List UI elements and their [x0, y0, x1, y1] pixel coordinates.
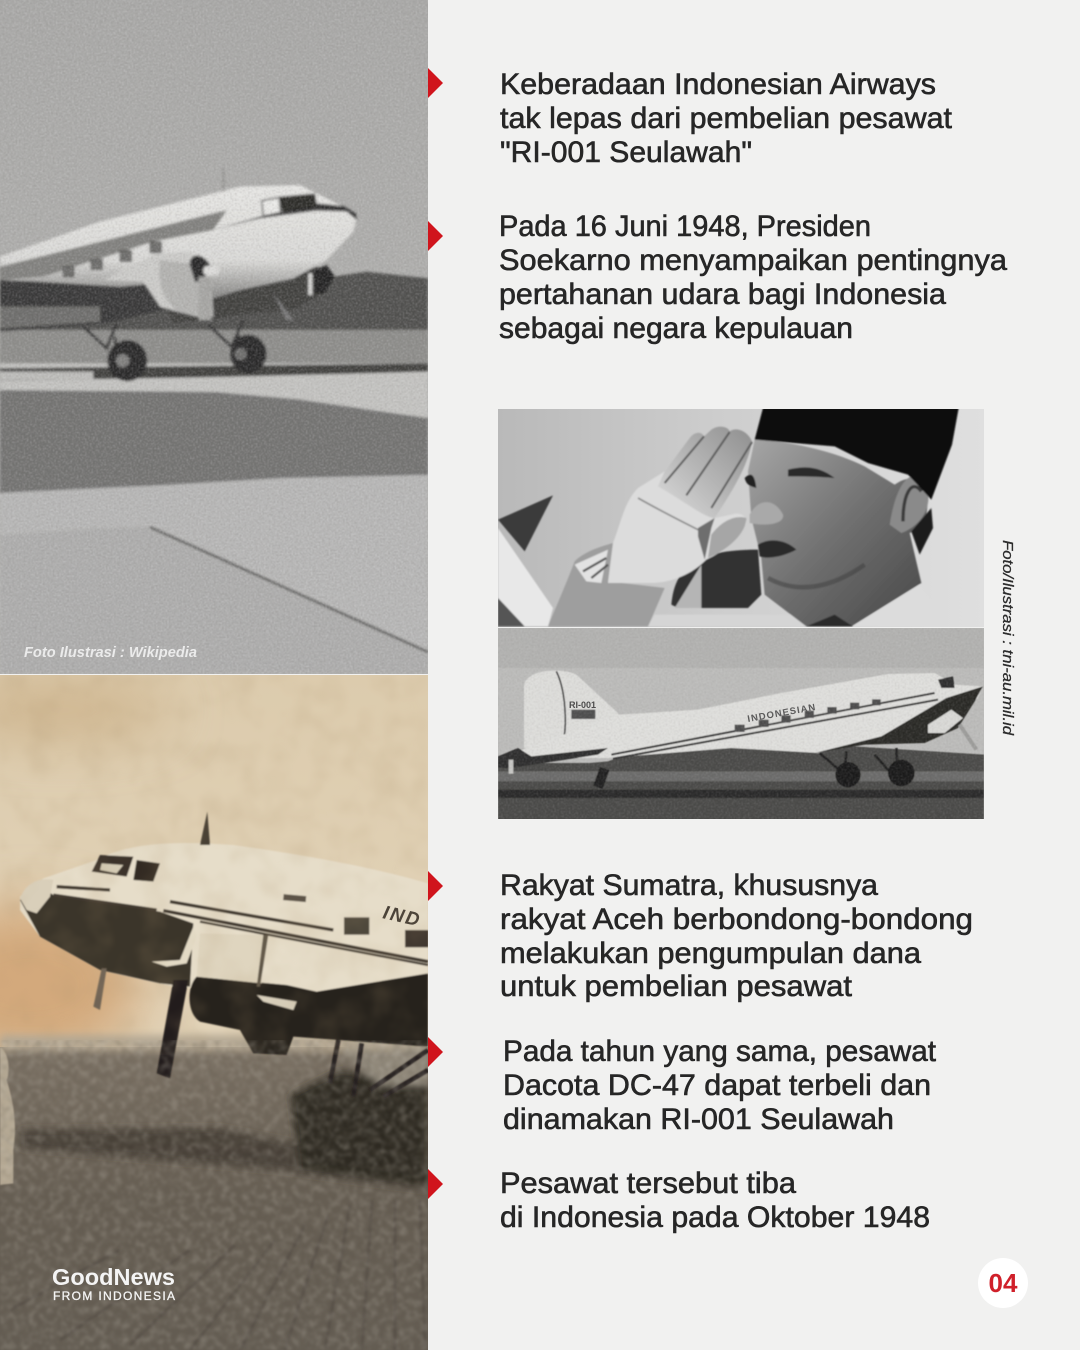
bullet 2: sebagai negara kepulauan — [499, 312, 853, 345]
bullet 4: Dacota DC-47 dapat terbeli dan — [503, 1069, 931, 1102]
page number badge — [978, 1258, 1028, 1308]
photo: sepia Seulawah plane — [0, 675, 428, 1350]
ground streaks — [10, 1200, 425, 1350]
logo: GoodNews from Indonesia: FROM INDONESIA — [53, 1289, 175, 1303]
bullet 2: Soekarno menyampaikan pentingnya — [499, 244, 1008, 277]
photo: RI-001 Seulawah side view — [498, 628, 984, 821]
sleeve — [548, 543, 665, 626]
bullet 4: Pada tahun yang sama, pesawat — [503, 1035, 936, 1068]
plane lettering: INDONESIAN — [747, 702, 817, 725]
bullet 5: di Indonesia pada Oktober 1948 — [500, 1201, 930, 1234]
concrete apron — [2, 474, 428, 651]
bullet 5: Pesawat tersebut tiba — [500, 1167, 797, 1200]
rear wing stub — [498, 748, 608, 768]
logo: GoodNews from Indonesia — [52, 1264, 175, 1303]
dark tarmac — [0, 390, 428, 493]
tail — [524, 670, 625, 748]
face — [748, 440, 927, 626]
engine — [103, 252, 213, 317]
wing — [0, 280, 163, 332]
logo: GoodNews from Indonesia: GoodNews — [52, 1264, 175, 1290]
plane and runway scene — [0, 168, 428, 674]
bullet 2: pertahanan udara bagi Indonesia — [499, 278, 947, 311]
plane lettering: IND — [381, 902, 423, 932]
bullet 1: tak lepas dari pembelian pesawat — [500, 102, 952, 135]
bullet 4: dinamakan RI-001 Seulawah — [503, 1103, 894, 1136]
bullet 3 — [500, 869, 973, 1003]
bullet 5 — [500, 1167, 930, 1234]
bullet 2: Pada 16 Juni 1948, Presiden — [499, 210, 871, 243]
fuselage — [0, 185, 357, 307]
bullet 3: rakyat Aceh berbondong-bondong — [500, 903, 973, 936]
bullet 3: Rakyat Sumatra, khususnya — [500, 869, 879, 902]
arrow marker 2 — [428, 221, 443, 251]
page number badge: 04 — [989, 1268, 1018, 1298]
bullet 4 — [503, 1035, 936, 1136]
gear — [819, 747, 898, 772]
bullet 2 — [499, 210, 1008, 345]
arrow marker 3 — [428, 871, 443, 901]
bullet 1: Keberadaan Indonesian Airways — [500, 68, 936, 101]
photo: Soekarno saluting — [498, 408, 984, 627]
film grain — [0, 0, 428, 674]
landing gear — [82, 320, 244, 351]
bullet 3: melakukan pengumpulan dana — [500, 937, 922, 970]
arrow marker 1 — [428, 68, 443, 98]
arrow marker 4 — [428, 1037, 443, 1067]
collar — [852, 584, 920, 626]
fuselage — [518, 673, 983, 758]
person at left edge — [0, 1047, 15, 1185]
under-belly shadow and far engine — [167, 267, 333, 323]
fez — [755, 408, 959, 500]
arrow marker 5 — [428, 1169, 443, 1199]
bullet 1: "RI-001 Seulawah" — [500, 136, 752, 169]
photo credit: Wikipedia: Foto Ilustrasi : Wikipedia — [24, 644, 197, 661]
photo credit: tni-au.mil.id: Foto/Ilustrasi : tni-au.mil.id — [999, 540, 1015, 736]
wing underside — [815, 686, 983, 753]
photo: white DC-3 on runway — [0, 0, 428, 674]
bullet 1 — [500, 68, 952, 169]
bullet 3: untuk pembelian pesawat — [500, 970, 852, 1003]
paper stains — [0, 675, 428, 1055]
hand — [608, 472, 744, 584]
plane silhouette — [0, 812, 428, 1185]
photo: RI-001 Seulawah side view: RI-001 — [569, 700, 596, 710]
